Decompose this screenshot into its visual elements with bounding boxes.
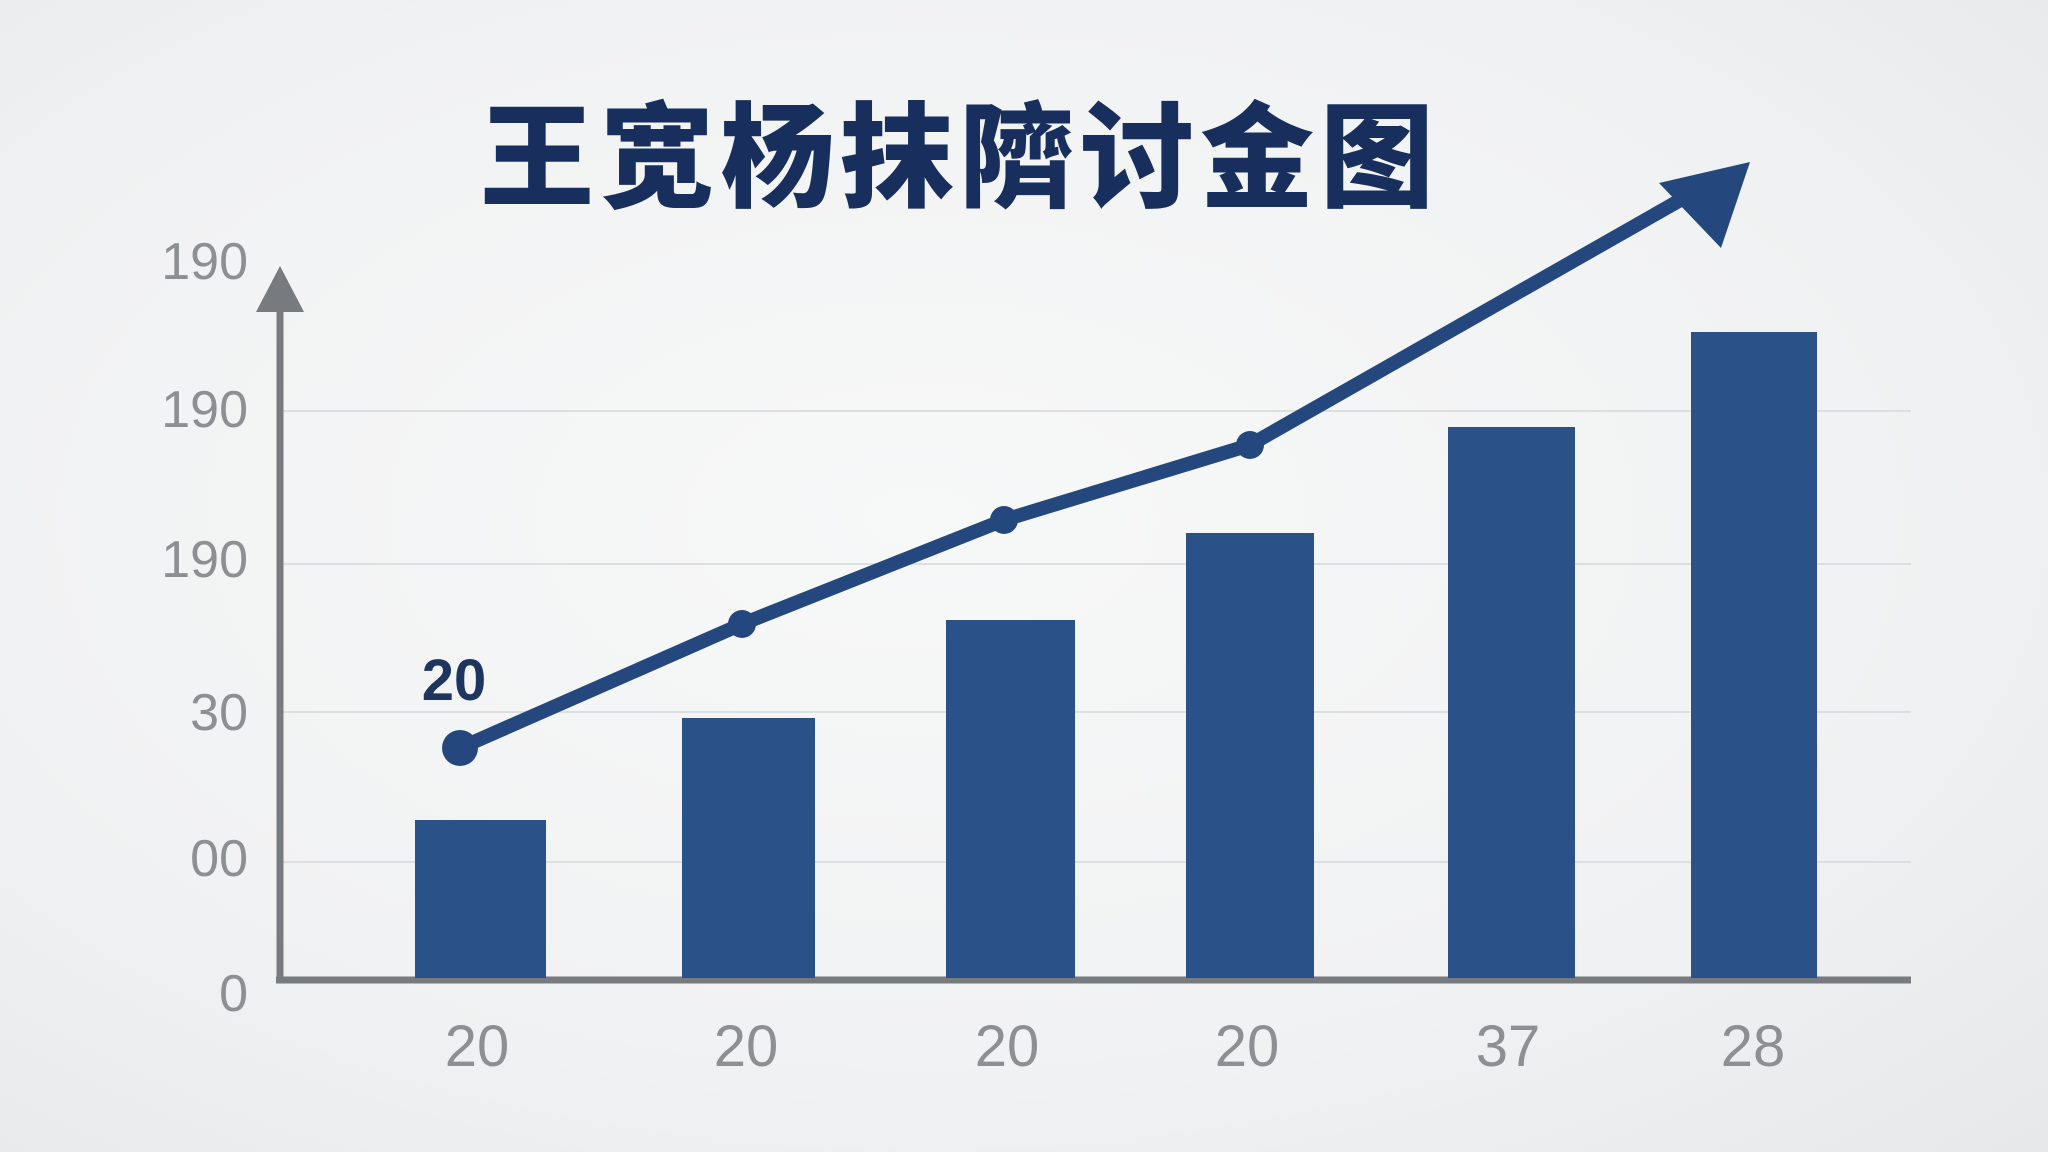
y axis	[256, 266, 304, 982]
x axis labels	[445, 1014, 1785, 1079]
y axis labels	[161, 233, 248, 1023]
x axis labels: 20	[975, 1014, 1039, 1079]
data label: 20	[422, 648, 486, 713]
y axis labels: 190	[161, 233, 248, 291]
y axis labels: 190	[161, 531, 248, 589]
y axis labels: 0	[219, 965, 248, 1023]
title: 王宽杨抹隮讨金图	[480, 96, 1440, 223]
y axis labels: 00	[190, 830, 248, 888]
y axis labels: 30	[190, 684, 248, 742]
x axis labels: 20	[445, 1014, 509, 1079]
x axis	[276, 976, 1911, 984]
trend line arrow	[442, 162, 1750, 766]
x axis labels: 28	[1721, 1014, 1785, 1079]
x axis labels: 20	[714, 1014, 778, 1079]
x axis labels: 37	[1476, 1014, 1540, 1079]
y axis labels: 190	[161, 381, 248, 439]
x axis labels: 20	[1215, 1014, 1279, 1079]
bars	[415, 332, 1817, 978]
